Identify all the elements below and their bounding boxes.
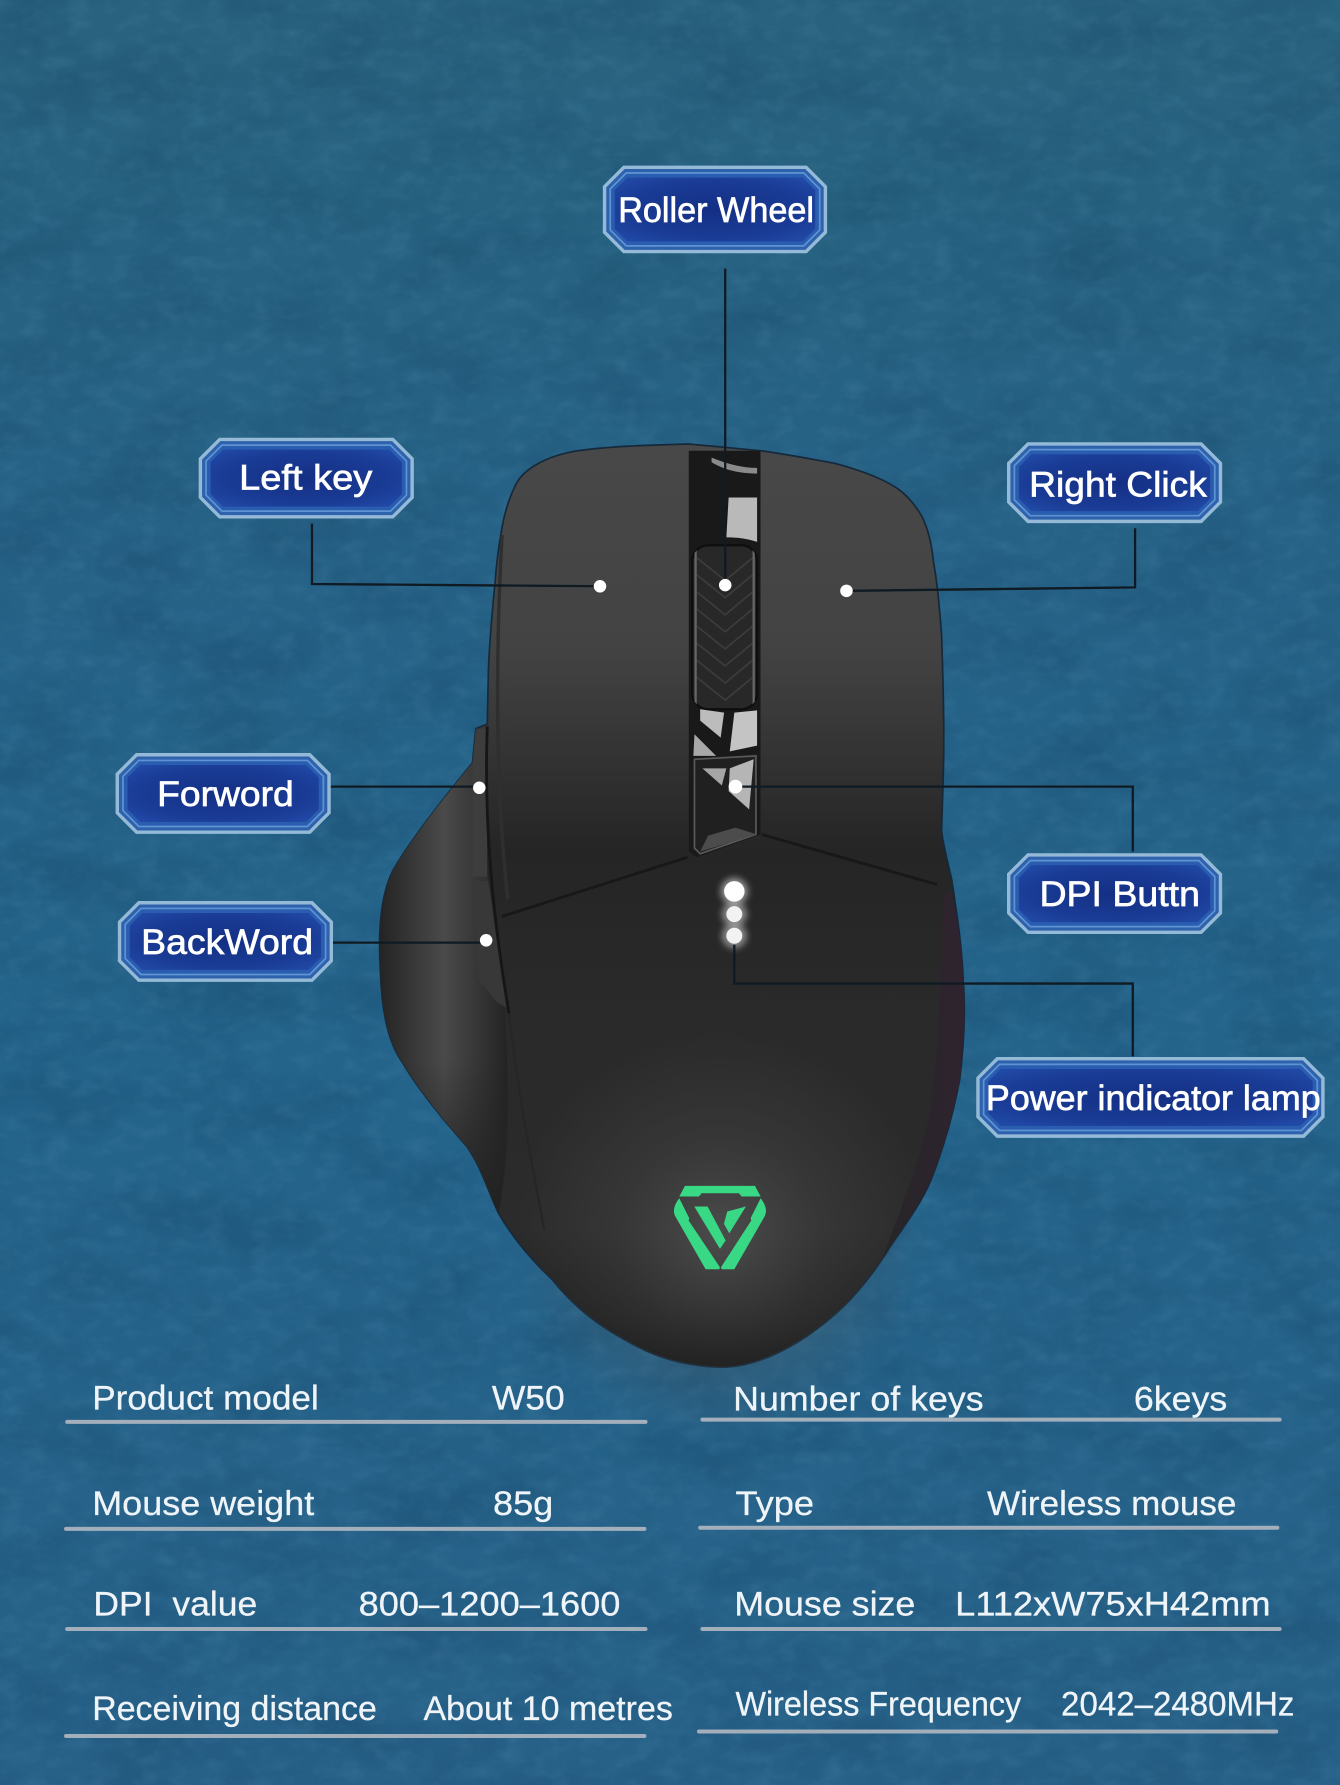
label: Left key: Left key bbox=[239, 459, 373, 498]
spec: mouse weight: Mouse weight bbox=[92, 1485, 315, 1523]
label: BackWord bbox=[120, 903, 331, 980]
spec: number of keys: 6keys bbox=[1134, 1380, 1227, 1418]
label: Right Click bbox=[1009, 444, 1220, 521]
spec: DPI value bbox=[67, 1585, 646, 1629]
channel top highlight bbox=[712, 458, 757, 474]
label: Power indicator lamp bbox=[978, 1059, 1323, 1136]
spec: mouse size: L112xW75xH42mm bbox=[955, 1585, 1271, 1623]
label: Forword: Forword bbox=[157, 775, 294, 814]
spec: wireless frequency: 2042–2480MHz bbox=[1061, 1686, 1294, 1724]
spec: type: Wireless mouse bbox=[987, 1485, 1236, 1523]
spec: DPI value: 800–1200–1600 bbox=[359, 1585, 620, 1623]
palm highlight around logo bbox=[516, 1030, 926, 1440]
callout lines bbox=[312, 269, 1135, 1056]
lower channel gloss bbox=[693, 709, 757, 756]
label: Power indicator lamp: Power indicator lamp bbox=[986, 1079, 1321, 1118]
forward side button bbox=[472, 729, 487, 877]
label: DPI Buttn bbox=[1009, 855, 1220, 932]
body side seam bbox=[486, 726, 509, 1013]
palm seam right bbox=[762, 834, 937, 885]
label: DPI Buttn: DPI Buttn bbox=[1039, 875, 1200, 914]
power indicator LEDs bbox=[721, 878, 748, 948]
spec table bbox=[66, 1379, 1294, 1736]
callout dots bbox=[473, 579, 853, 947]
spec: product model: W50 bbox=[492, 1379, 565, 1417]
label: BackWord: BackWord bbox=[141, 923, 313, 962]
mouse silhouette bbox=[380, 444, 964, 1367]
left lower strip seam bbox=[509, 1013, 544, 1229]
channel upper gloss bbox=[726, 497, 757, 542]
palm seam left bbox=[502, 857, 688, 916]
left key inner edge bbox=[498, 535, 508, 899]
label: Roller Wheel bbox=[605, 167, 825, 252]
spec: mouse weight bbox=[66, 1485, 644, 1529]
right edge shading bbox=[882, 888, 964, 1258]
spec: wireless frequency: Wireless Frequency bbox=[735, 1686, 1022, 1724]
spec: number of keys: Number of keys bbox=[733, 1380, 984, 1418]
backward side button bbox=[472, 881, 507, 1007]
spec: receiving distance bbox=[66, 1690, 673, 1736]
spec: product model: Product model bbox=[92, 1379, 319, 1417]
label: Forword bbox=[117, 755, 329, 832]
DPI button bbox=[694, 756, 757, 854]
thumb wing bbox=[380, 763, 509, 1214]
spec: DPI value: DPI value bbox=[93, 1585, 257, 1623]
spec: mouse size bbox=[702, 1585, 1280, 1629]
icon: green brand logo bbox=[674, 1186, 766, 1269]
spec: type bbox=[700, 1485, 1277, 1528]
spec: type: Type bbox=[735, 1485, 814, 1523]
mouse illustration bbox=[380, 444, 964, 1440]
spec: mouse size: Mouse size bbox=[734, 1585, 915, 1623]
spec: number of keys bbox=[702, 1380, 1280, 1420]
scroll wheel bbox=[692, 545, 757, 709]
label: Roller Wheel: Roller Wheel bbox=[618, 191, 814, 230]
spec: wireless frequency bbox=[699, 1686, 1294, 1731]
spec: receiving distance: About 10 metres bbox=[424, 1690, 673, 1728]
spec: receiving distance: Receiving distance bbox=[92, 1690, 377, 1728]
wheel channel bbox=[689, 451, 761, 857]
label: Left key bbox=[200, 439, 412, 517]
spec: mouse weight: 85g bbox=[493, 1485, 553, 1523]
label: Right Click: Right Click bbox=[1029, 465, 1207, 504]
spec: product model bbox=[67, 1379, 646, 1422]
